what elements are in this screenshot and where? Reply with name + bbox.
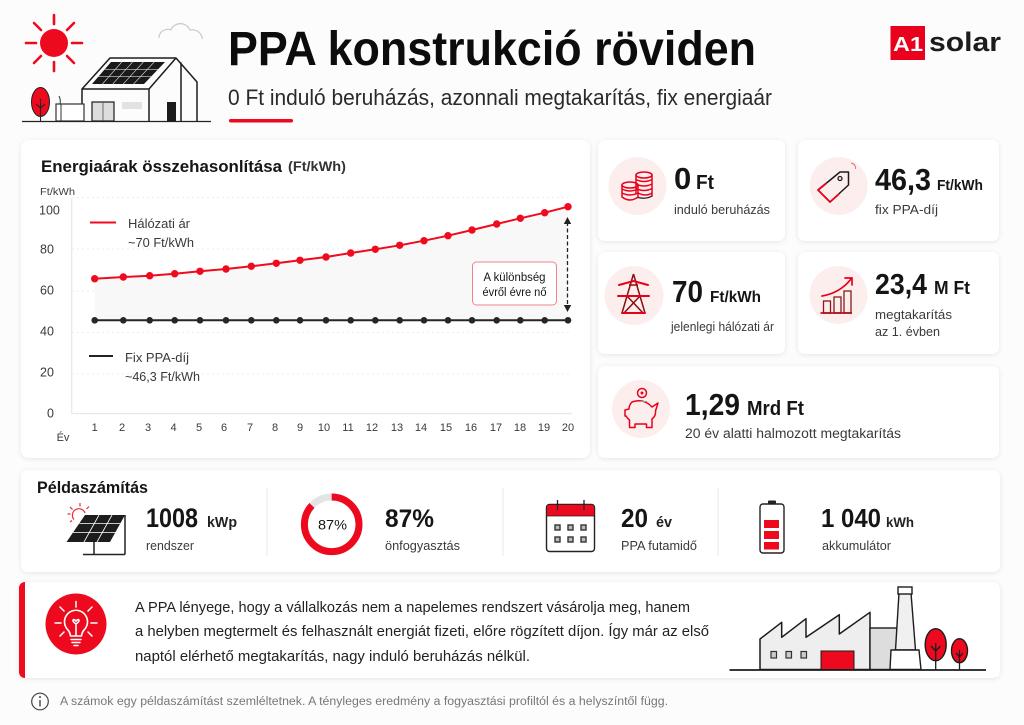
- header illustration: sun and solar house: [22, 14, 212, 122]
- icon: battery: [760, 500, 784, 553]
- legend: fixed PPA fee: ~46,3 Ft/kWh: [125, 370, 200, 384]
- explanation text: a helyben megtermelt és felhasznált energiát fizeti, előre rögzített díjon. Így már az első: [135, 623, 709, 640]
- x axis labels: 7: [247, 422, 253, 434]
- stat: PPA term: 20: [621, 503, 648, 533]
- value: 1,29 Mrd Ft: 1,29: [685, 387, 740, 422]
- icon: piggy bank: [625, 388, 658, 428]
- y axis labels: 60: [40, 284, 54, 298]
- arrow: gap between prices: [564, 217, 571, 312]
- x axis labels: 16: [465, 422, 477, 434]
- icon: tree: [32, 88, 50, 121]
- icon: cloud: [159, 24, 202, 39]
- value: 70 Ft/kWh: 70: [672, 274, 703, 309]
- panel: current grid price: [598, 252, 785, 354]
- stat: self consumption: önfogyasztás: [385, 539, 460, 553]
- y axis labels: [39, 186, 75, 420]
- x axis labels: 2: [119, 422, 125, 434]
- logo: A1 solar: [890, 26, 1002, 60]
- panel: cumulative savings: [598, 366, 999, 458]
- value: 46,3 Ft/kWh: [875, 162, 983, 197]
- label: [875, 307, 952, 339]
- panel: PPA explanation: [19, 582, 1000, 678]
- x axis labels: 12: [366, 422, 378, 434]
- stat: PPA term: PPA futamidő: [621, 539, 697, 553]
- x axis labels: 15: [440, 422, 452, 434]
- footnote: [32, 693, 668, 710]
- panel: initial investment: [598, 140, 785, 241]
- stat: self consumption: [385, 505, 460, 553]
- legend: grid price: ~70 Ft/kWh: [128, 236, 194, 250]
- stat: system size: [146, 503, 237, 553]
- area between the lines: [95, 207, 568, 320]
- logo: A1 solar: solar: [929, 27, 1002, 57]
- explanation text: naptól elérhető megtakarítás, nagy induló beruházás nélkül.: [135, 649, 530, 665]
- x axis labels: 18: [514, 422, 526, 434]
- value: 46,3 Ft/kWh: 46,3: [875, 162, 931, 197]
- icon: rising bar chart: [820, 278, 852, 313]
- line: grid price: [91, 203, 572, 282]
- callout: the gap grows year by year: évről évre nő: [482, 287, 546, 299]
- icon: factory with chimney and trees: [730, 587, 986, 670]
- label: az 1. évben: [875, 324, 940, 339]
- donut chart: 87% self consumption: 87%: [318, 518, 347, 532]
- value: 0 Ft: 0: [674, 161, 691, 196]
- x axis labels: 4: [170, 422, 177, 434]
- footnote: A számok egy példaszámítást szemléltetnek. A tényleges eredmény a fogyasztási profiltól és a helyszíntől függ.: [60, 696, 668, 708]
- title accent line: [229, 119, 293, 122]
- chart heading: Energiaárak összehasonlítása: [41, 157, 283, 176]
- x axis labels: 20: [562, 422, 574, 434]
- subtitle: 0 Ft induló beruházás, azonnali megtakarítás, fix energiaár: [228, 85, 772, 110]
- x axis labels: 17: [490, 422, 502, 434]
- value: 70 Ft/kWh: [672, 274, 761, 309]
- y axis labels: 80: [40, 242, 54, 256]
- x axis labels: 1: [92, 422, 98, 434]
- x axis labels: 19: [538, 422, 550, 434]
- panel: fixed PPA fee: [798, 140, 999, 241]
- icon: house with solar roof: [56, 58, 197, 121]
- value: 23,4 M Ft: M Ft: [934, 278, 970, 298]
- x axis labels: 9: [297, 422, 303, 434]
- x axis labels: 10: [318, 422, 330, 434]
- stat: battery capacity: [821, 503, 914, 553]
- stat: system size: 1008: [146, 503, 198, 533]
- chart heading: (Ft/kWh): [288, 159, 346, 174]
- explanation text: A PPA lényege, hogy a vállalkozás nem a napelemes rendszert vásárolja meg, hanem: [135, 600, 690, 616]
- stat: battery capacity: 1 040: [821, 503, 881, 533]
- explanation text: [135, 600, 709, 665]
- icon: calendar: [546, 500, 594, 552]
- icon: pylon: [618, 274, 649, 313]
- legend: fixed PPA fee: [89, 351, 200, 384]
- legend: grid price: [90, 217, 194, 250]
- icon: sun: [26, 15, 82, 71]
- stat: battery capacity: kWh: [886, 514, 914, 530]
- value: 23,4 M Ft: 23,4: [875, 269, 927, 301]
- icon: price tag: [818, 163, 856, 202]
- heading: Példaszámítás: [37, 479, 148, 497]
- value: 0 Ft: [674, 161, 714, 196]
- y axis labels: 20: [40, 366, 54, 380]
- icon: info: [32, 693, 48, 710]
- stat: self consumption: 87%: [385, 505, 434, 533]
- value: 46,3 Ft/kWh: Ft/kWh: [937, 177, 983, 194]
- value: 0 Ft: Ft: [696, 172, 714, 194]
- title: PPA konstrukció röviden: [228, 23, 756, 76]
- stat: system size: kWp: [207, 515, 237, 531]
- legend: grid price: Hálózati ár: [128, 217, 190, 231]
- line: fixed PPA fee: [91, 317, 571, 324]
- label: 20 év alatti halmozott megtakarítás: [685, 426, 901, 441]
- panel: first year savings: [798, 252, 999, 354]
- icon: light bulb: [46, 594, 106, 654]
- callout: the gap grows year by year: [472, 262, 556, 305]
- stat: PPA term: [621, 503, 697, 553]
- label: megtakarítás: [875, 307, 952, 322]
- panel: example calculation: [21, 470, 1000, 572]
- y axis labels: Ft/kWh: [40, 186, 75, 198]
- value: 1,29 Mrd Ft: Mrd Ft: [747, 398, 804, 420]
- value: 70 Ft/kWh: Ft/kWh: [710, 289, 761, 306]
- x axis labels: [57, 422, 574, 444]
- stat: PPA term: év: [656, 514, 673, 531]
- y axis labels: 100: [39, 204, 60, 218]
- x axis labels: 13: [391, 422, 403, 434]
- x axis labels: Év: [57, 431, 70, 444]
- y axis labels: 0: [47, 406, 54, 420]
- icon: coins: [622, 172, 652, 200]
- x axis labels: 14: [415, 422, 427, 434]
- x axis labels: 3: [145, 422, 151, 434]
- x axis labels: 5: [196, 422, 202, 434]
- x axis labels: 6: [221, 422, 227, 434]
- stat: battery capacity: akkumulátor: [822, 539, 891, 553]
- stat: system size: rendszer: [146, 539, 194, 553]
- value: 1,29 Mrd Ft: [685, 387, 804, 422]
- x axis labels: 8: [272, 422, 278, 434]
- x axis labels: 11: [342, 422, 354, 434]
- panel: energy price comparison chart: [21, 140, 590, 458]
- value: 23,4 M Ft: [875, 269, 970, 301]
- legend: fixed PPA fee: Fix PPA-díj: [125, 351, 189, 365]
- y axis labels: 40: [40, 324, 54, 338]
- icon: solar panel with sun: [66, 503, 125, 554]
- logo: A1 solar: A1: [893, 34, 923, 56]
- callout: the gap grows year by year: A különbség: [484, 272, 546, 284]
- label: induló beruházás: [674, 202, 770, 217]
- label: fix PPA-díj: [875, 202, 938, 217]
- donut chart: 87% self consumption: [304, 497, 359, 552]
- label: jelenlegi hálózati ár: [670, 319, 775, 334]
